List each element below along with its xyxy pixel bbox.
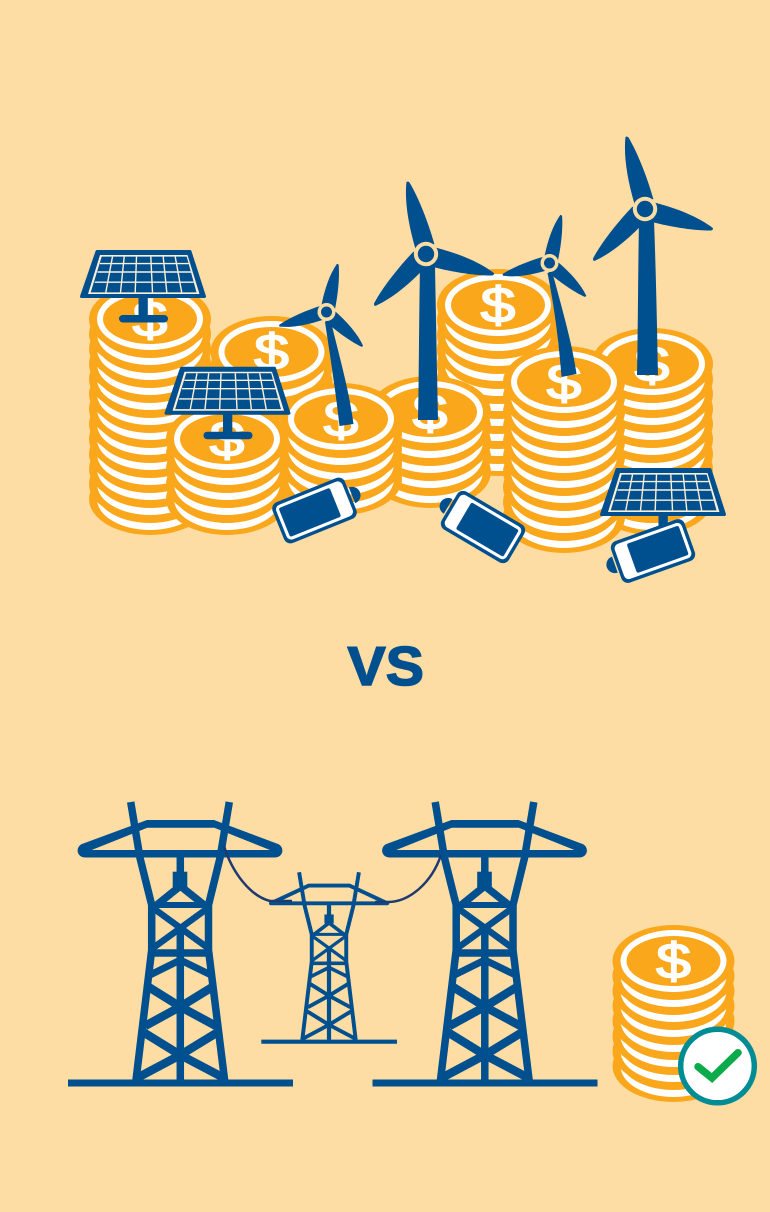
coin stack: back left: $ xyxy=(254,324,289,380)
icon: green check badge xyxy=(681,1029,754,1103)
coin stack: under second solar panel xyxy=(166,403,288,535)
icon: small tower centre xyxy=(261,872,397,1042)
icon: battery left xyxy=(270,472,368,546)
coin stack: under small turbine: $ xyxy=(324,391,358,447)
coin stack: centre xyxy=(369,376,491,508)
coin stack: far left tall: $ xyxy=(133,291,167,347)
coin stack: under small turbine xyxy=(280,383,402,515)
icon: solar panel on second stack xyxy=(166,368,289,439)
coin stack: front right: $ xyxy=(547,354,581,410)
coin stack: far right: $ xyxy=(635,336,669,392)
illustration: transmission towers xyxy=(68,802,598,1083)
icon: large tower left xyxy=(68,802,293,1083)
transmission cables xyxy=(224,846,441,902)
icon: small wind turbine right xyxy=(501,213,590,377)
icon: small wind turbine left xyxy=(277,262,367,426)
icon: battery centre xyxy=(430,483,528,566)
icon: solar panel at right xyxy=(602,470,724,529)
illustration: renewables and batteries on coin stacks xyxy=(82,134,724,588)
coin stack: back centre tall xyxy=(437,269,559,476)
icon: large tower right xyxy=(372,802,598,1083)
icon: battery right xyxy=(599,517,697,588)
coin stack: front right xyxy=(503,346,625,553)
coin stack: back left xyxy=(210,316,332,448)
icon: tall wind turbine right xyxy=(586,134,715,375)
coin stack: small stack with check xyxy=(612,925,734,1102)
coin stack: under second solar panel: $ xyxy=(210,411,244,467)
coin stack: far right xyxy=(591,328,713,535)
coin stack: back centre tall: $ xyxy=(481,277,515,333)
coin stack: centre: $ xyxy=(413,384,447,440)
coin stack: small stack with check: $ xyxy=(656,933,691,989)
icon: tall wind turbine centre xyxy=(367,179,496,420)
icon: solar panel on left stack xyxy=(82,252,204,322)
coin stack: far left tall xyxy=(89,283,211,535)
heading: VS: VS xyxy=(348,635,424,697)
